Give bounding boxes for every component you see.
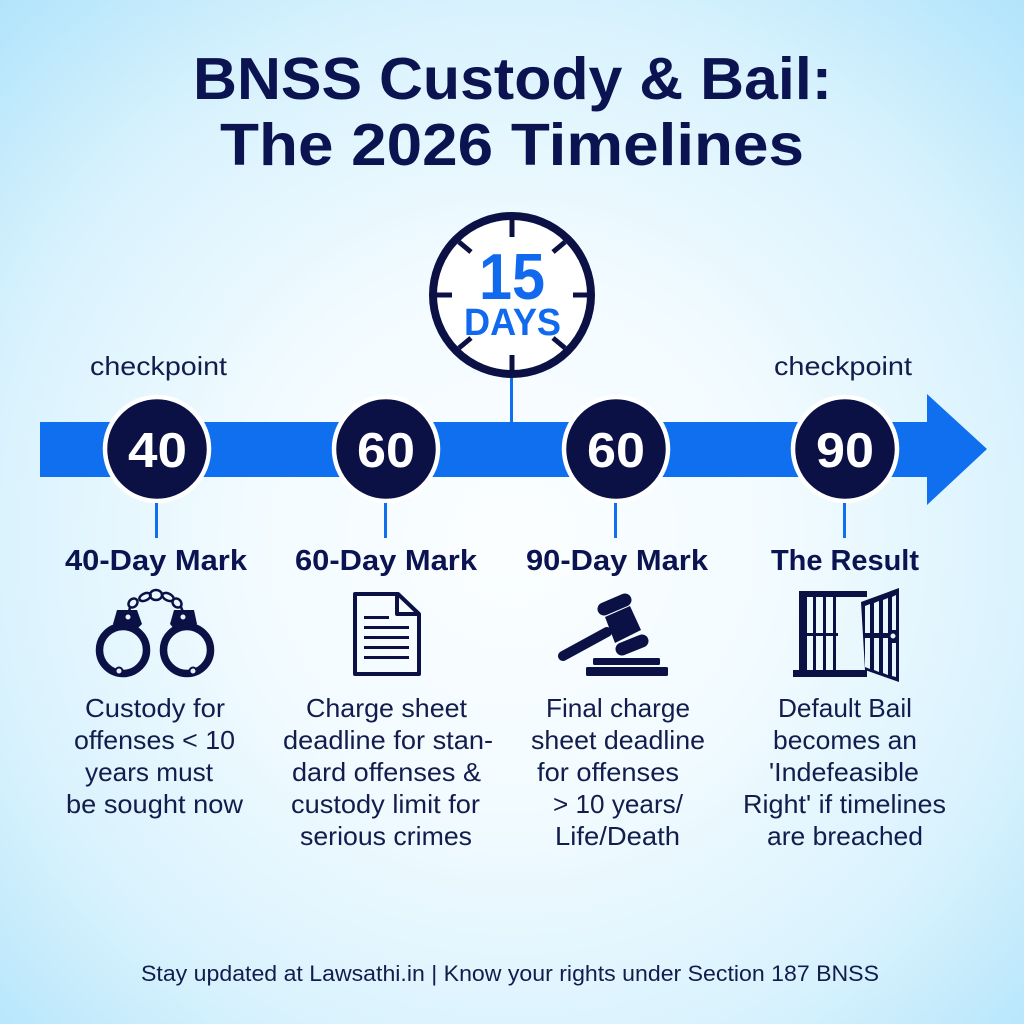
connector stems <box>155 503 846 538</box>
text: result description: Right' if timelines <box>743 789 946 819</box>
checkpoint label right: checkpoint <box>774 351 913 381</box>
marker 60 second <box>564 397 668 501</box>
footer: Stay updated at Lawsathi.in | Know your rights under Section 187 BNSS <box>141 961 879 986</box>
text: 90-day description: Final charge <box>546 693 690 723</box>
clock: 15 days: DAYS <box>464 302 561 344</box>
heading: The Result: The Result <box>771 545 919 577</box>
checkpoint label left: checkpoint <box>90 351 228 381</box>
text: 40-day description: be sought now <box>66 789 243 819</box>
marker 40: 40 <box>128 424 187 478</box>
marker 60: 60 <box>357 424 415 478</box>
title: BNSS Custody & Bail: <box>193 46 832 112</box>
text: 40-day description: offenses < 10 <box>74 725 235 755</box>
text: result description: are breached <box>767 821 923 851</box>
title: The 2026 Timelines <box>220 112 804 178</box>
text: 60-day description: serious crimes <box>300 821 472 851</box>
text: result description <box>743 693 946 851</box>
icon: open cell door <box>793 588 899 682</box>
title <box>193 46 832 178</box>
text: 90-day description: > 10 years/ <box>553 789 684 819</box>
heading: 90-Day Mark: 90-Day Mark <box>526 545 709 577</box>
text: 40-day description: Custody for <box>85 693 225 723</box>
text: 60-day description: custody limit for <box>291 789 480 819</box>
text: 90-day description: Life/Death <box>555 821 680 851</box>
text: 60-day description: Charge sheet <box>306 693 468 723</box>
text: 90-day description: sheet deadline <box>531 725 705 755</box>
text: result description: 'Indefeasible <box>769 757 919 787</box>
clock: 15 days <box>433 216 591 374</box>
text: 90-day description: for offenses <box>537 757 679 787</box>
text: 90-day description <box>531 693 705 851</box>
icon: document <box>355 594 419 674</box>
clock: 15 days: 15 <box>479 240 545 313</box>
heading: 60-Day Mark: 60-Day Mark <box>295 545 478 577</box>
text: result description: becomes an <box>773 725 917 755</box>
text: 40-day description <box>66 693 243 819</box>
icon: handcuffs <box>100 590 210 674</box>
text: 40-day description: years must <box>85 757 214 787</box>
text: 60-day description <box>283 693 493 851</box>
marker 60 second: 60 <box>587 424 645 478</box>
marker 90: 90 <box>816 424 874 478</box>
text: 60-day description: deadline for stan- <box>283 725 493 755</box>
marker 60 <box>334 397 438 501</box>
text: 60-day description: dard offenses & <box>292 757 481 787</box>
text: result description: Default Bail <box>778 693 912 723</box>
timeline arrow <box>40 394 987 505</box>
heading: 40-Day Mark: 40-Day Mark <box>65 545 248 577</box>
icon: gavel <box>563 600 668 676</box>
clock connector <box>510 378 513 422</box>
marker 40 <box>105 397 209 501</box>
marker 90 <box>793 397 897 501</box>
